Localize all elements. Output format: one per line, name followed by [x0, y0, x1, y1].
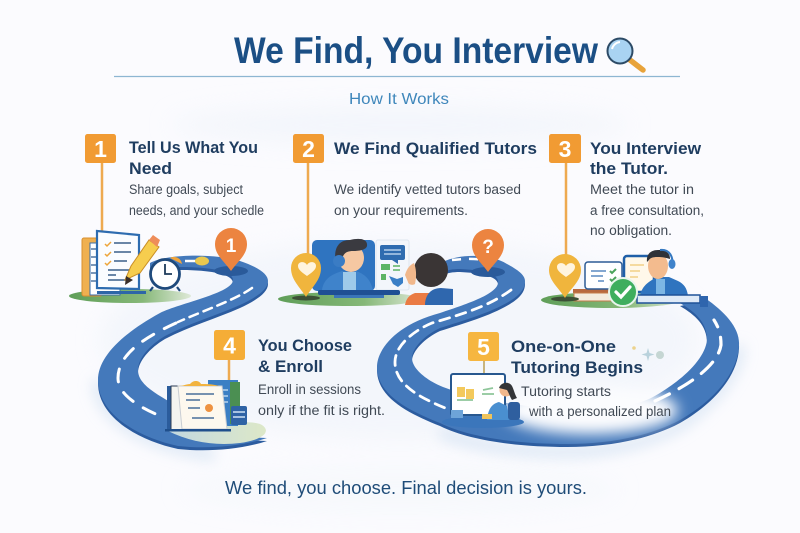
step 3 heading: You Interview [590, 139, 702, 158]
step 4 description [258, 382, 385, 418]
step 5 heading: One-on-One [511, 337, 616, 356]
step 1 heading [129, 138, 258, 178]
step 1 heading: Tell Us What You [129, 138, 258, 157]
step 4 heading: & Enroll [258, 357, 323, 376]
road: centre S-curve to right loop [377, 256, 739, 447]
panel: step 4 [165, 330, 385, 444]
step 3 number badge: 3 [559, 136, 571, 162]
step 4 ground [168, 422, 266, 444]
road marker [185, 256, 209, 266]
icon: heart pin [549, 254, 581, 302]
icon: monitor with learner [451, 374, 520, 420]
decorative sparkles [632, 346, 664, 361]
step 4 heading [258, 336, 352, 376]
icon: location pin 1 [214, 228, 248, 276]
icon: notebook checklist and pencil [82, 231, 160, 296]
step 4 number badge: 4 [223, 332, 236, 358]
title: We Find, You Interview [234, 30, 598, 71]
road: upper-left through step 4 [98, 256, 268, 450]
step 1 stem [101, 160, 103, 235]
step 2 ground [278, 292, 422, 306]
step 1 ground [69, 289, 191, 303]
step 3 number badge [549, 134, 581, 163]
step 5 heading [511, 337, 643, 377]
step 3 heading: the Tutor. [590, 159, 668, 178]
step 1 number badge: 1 [94, 136, 107, 162]
step 5 number badge [468, 332, 499, 361]
icon: question pin: ? [482, 237, 494, 258]
step 2 number badge: 2 [302, 136, 315, 162]
step 3 stem [565, 160, 567, 258]
step 1 heading: Need [129, 159, 172, 178]
step 3 ground [541, 292, 681, 308]
step 5 platform [442, 416, 524, 428]
step 5 stem [483, 359, 485, 374]
icon: heart pin [291, 253, 321, 300]
panel: step 3 [541, 134, 708, 308]
icon: laptop with tutor video call [312, 239, 409, 298]
road halo [98, 345, 739, 455]
step 5 description: Tutoring starts [521, 384, 611, 399]
step 2 stem [307, 160, 309, 258]
icon: green check badge [609, 278, 637, 306]
step 4 description: only if the fit is right. [258, 403, 385, 418]
step 2 description: on your requirements. [334, 203, 468, 218]
step 2 description [334, 182, 521, 218]
icon: student from behind [405, 253, 453, 305]
soft background glow [100, 105, 700, 514]
icon: enrollment documents [165, 380, 247, 432]
step 1 description: needs, and your schedle [129, 203, 264, 218]
panel: step 2 [278, 134, 537, 306]
icon: question pin [471, 229, 505, 277]
icon: tutor with headset at laptop [624, 250, 708, 307]
step 5 description: with a personalized plan [528, 404, 671, 419]
step 3 heading [590, 139, 702, 178]
step 3 description [590, 182, 704, 238]
step 5 description [521, 384, 671, 419]
step 3 description: Meet the tutor in [590, 182, 694, 197]
step 4 number badge [214, 330, 245, 360]
panel: step 1 [69, 134, 264, 303]
subtitle: How It Works [349, 91, 449, 108]
step 5 heading: Tutoring Begins [511, 358, 643, 377]
panel: step 5 [442, 332, 671, 428]
step 3 description: a free consultation, [590, 203, 704, 218]
step 1 description: Share goals, subject [129, 182, 243, 197]
step 2 description: We identify vetted tutors based [334, 182, 521, 197]
step 2 number badge [293, 134, 324, 163]
icon: checklist card [585, 262, 622, 289]
icon: location pin 1: 1 [226, 236, 237, 257]
footer message: We find, you choose. Final decision is yours. [225, 477, 587, 498]
step 4 heading: You Choose [258, 336, 352, 355]
step 4 description: Enroll in sessions [258, 382, 361, 397]
title divider [114, 76, 680, 78]
step 2 heading: We Find Qualified Tutors [334, 139, 537, 158]
step 5 number badge: 5 [477, 334, 490, 360]
step 3 description: no obligation. [590, 223, 672, 238]
step 1 description [129, 182, 264, 218]
icon: alarm clock [150, 257, 182, 291]
step 4 stem [228, 358, 230, 382]
icon: books [573, 289, 611, 301]
step 1 number badge [85, 134, 116, 163]
icon: magnifying glass [608, 38, 643, 70]
